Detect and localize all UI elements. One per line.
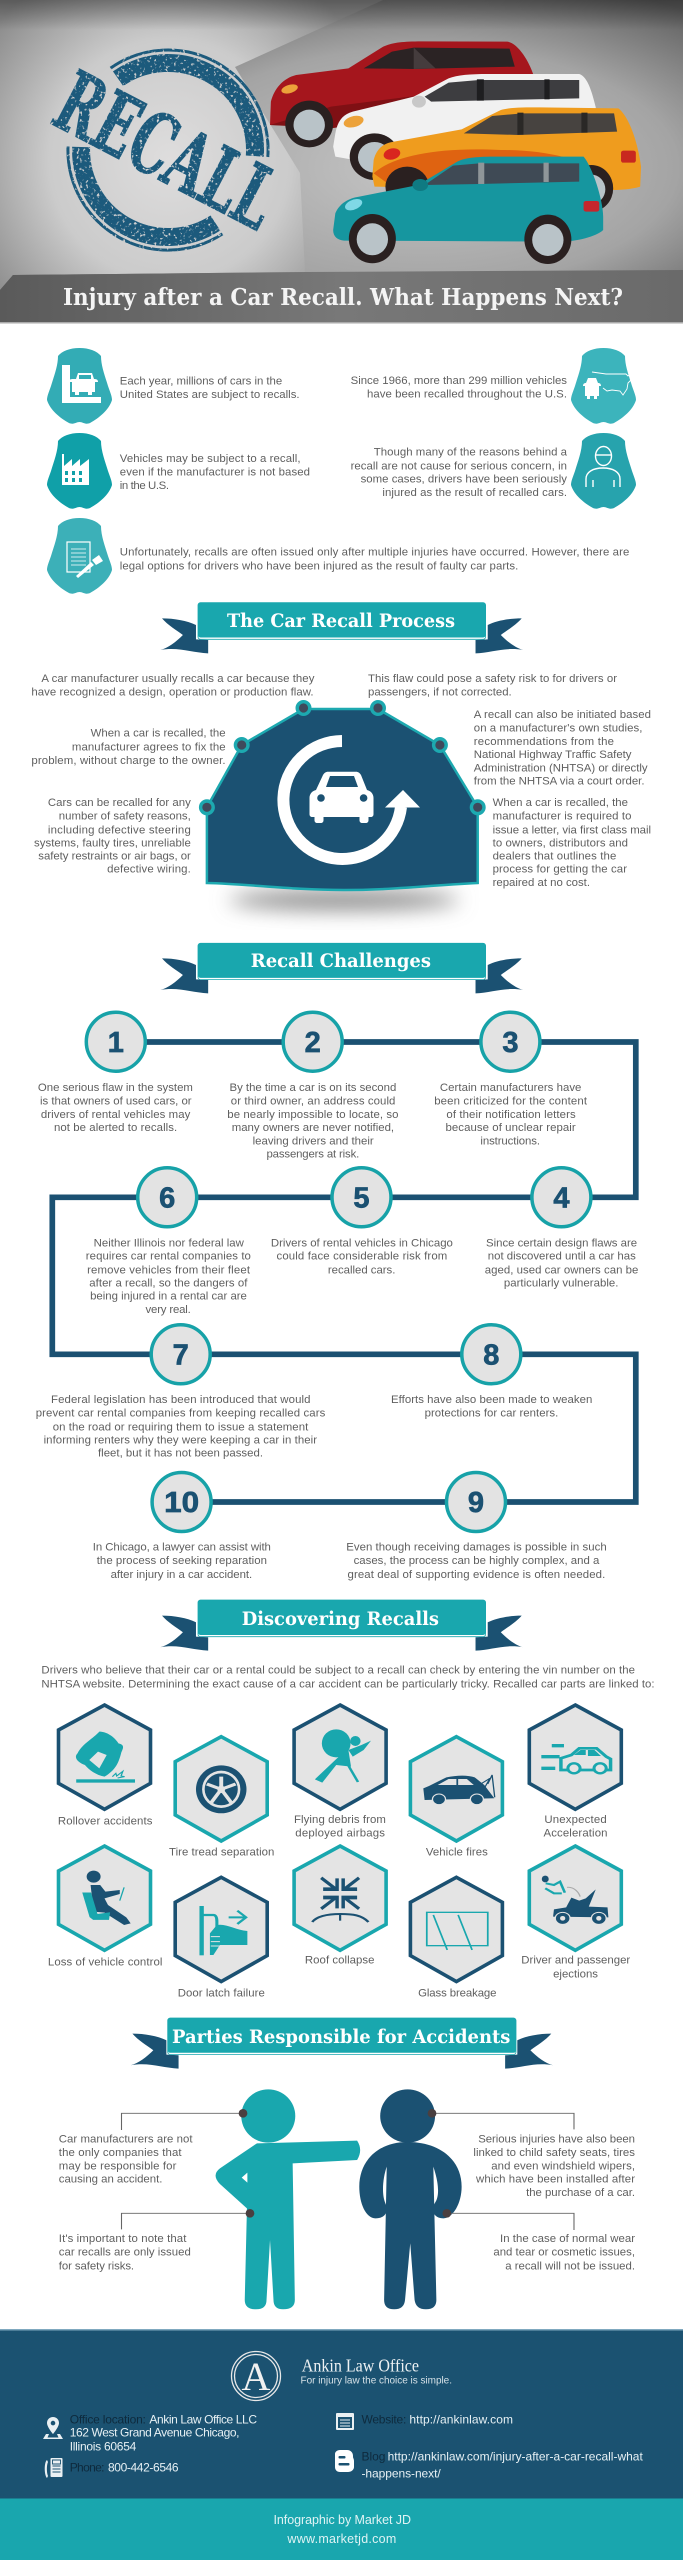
- teal car: [333, 157, 603, 264]
- office location: [43, 2412, 257, 2453]
- hero title: Injury after a Car Recall. What Happens Next?: [63, 284, 623, 311]
- glass breakage: [410, 1877, 502, 1999]
- text: top left: A car manufacturer usually recalls a car because they: [41, 673, 315, 685]
- step 6: after a recall, so the dangers of: [89, 1277, 248, 1289]
- step 5: [271, 1168, 453, 1276]
- teal pointing figure: [216, 2089, 360, 2309]
- unexpected acceleration: Unexpected: [544, 1814, 607, 1826]
- step 5: could face considerable risk from: [276, 1251, 447, 1263]
- unexpected acceleration: Acceleration: [544, 1828, 608, 1840]
- text: car manufacturers: may be responsible for: [59, 2160, 177, 2172]
- step 7: [36, 1325, 326, 1460]
- flying debris from airbags: deployed airbags: [295, 1828, 385, 1840]
- text: seriously injured: Though many of the reasons behind a: [374, 447, 568, 459]
- step 9: [346, 1472, 607, 1581]
- step 10: In Chicago, a lawyer can assist with: [93, 1542, 271, 1554]
- icon: injured driver: [571, 433, 636, 509]
- text: top left: [31, 673, 315, 699]
- step 2: passengers at risk.: [266, 1148, 359, 1160]
- footer: credit bar: Infographic by Market JD: [274, 2513, 411, 2527]
- step 9: great deal of supporting evidence is often needed.: [348, 1569, 605, 1581]
- icon: car front: [310, 772, 374, 823]
- step 6: very real.: [146, 1304, 191, 1316]
- text: seriously injured: [351, 447, 568, 499]
- step 10: [93, 1472, 271, 1581]
- step 4: 4: [553, 1182, 569, 1214]
- recall process shield: [207, 709, 478, 890]
- text: manufacturer not based in US: [120, 453, 310, 492]
- step 2: be nearly impossible to locate, so: [227, 1109, 398, 1121]
- text: letter to owners: manufacturer is required to: [493, 811, 632, 823]
- text: normal wear: [493, 2233, 635, 2272]
- blog: -happens-next/: [362, 2467, 441, 2481]
- blog: [335, 2450, 643, 2481]
- text: letter to owners: [493, 797, 651, 889]
- flying debris from airbags: Flying debris from: [294, 1814, 386, 1826]
- text: discovering recalls intro: [41, 1664, 655, 1690]
- blog: http://ankinlaw.com/injury-after-a-car-recall-what: [388, 2450, 643, 2464]
- text: top right: passengers, if not corrected.: [368, 687, 512, 699]
- text: serious injuries: Serious injuries have also been: [478, 2133, 635, 2145]
- text: letter to owners: issue a letter, via first class mail: [493, 824, 651, 836]
- step 5: recalled cars.: [328, 1264, 395, 1276]
- banner: Recall Challenges: Recall Challenges: [251, 950, 431, 972]
- office location: 162 West Grand Avenue Chicago,: [70, 2426, 240, 2440]
- text: car manufacturers: [59, 2133, 193, 2185]
- text: normal wear: and tear or cosmetic issues,: [493, 2247, 635, 2259]
- text: letter to owners: process for getting the car: [493, 864, 627, 876]
- text: serious injuries: the purchase of a car.: [526, 2187, 635, 2199]
- text: recall initiation: [474, 709, 651, 788]
- text: top right: [368, 673, 617, 699]
- banner: Recall Challenges: [160, 943, 523, 993]
- text: safety risks: [59, 2233, 191, 2272]
- step 3: been criticized for the content: [434, 1095, 588, 1107]
- text: top right: This flaw could pose a safety risk to for drivers or: [368, 673, 617, 685]
- firm name: Ankin Law Office: [302, 2356, 419, 2376]
- glass breakage: Glass breakage: [418, 1987, 496, 1999]
- icon: phone: [45, 2458, 62, 2478]
- dark standing figure: [359, 2089, 462, 2309]
- banner: Parties Responsible for Accidents: [131, 2018, 553, 2069]
- text: safety reasons: number of safety reasons,: [59, 811, 191, 823]
- flying debris from airbags: [294, 1705, 386, 1840]
- text: safety reasons: safety restraints or air bags, or: [38, 851, 191, 863]
- unexpected acceleration: [529, 1705, 621, 1840]
- step 4: not discovered until a car has: [488, 1251, 636, 1263]
- panel: parties responsible figures: [59, 2089, 635, 2309]
- text: letter to owners: When a car is recalled, the: [493, 797, 628, 809]
- step 10: the process of seeking reparation: [97, 1555, 267, 1567]
- text: top left: have recognized a design, operation or production flaw.: [31, 687, 314, 699]
- step 5: Drivers of rental vehicles in Chicago: [271, 1238, 453, 1250]
- step 9: cases, the process can be highly complex, and a: [354, 1555, 600, 1567]
- phone: 800-442-6546: [108, 2461, 179, 2475]
- step 4: [485, 1168, 638, 1289]
- text: recall initiation: A recall can also be initiated based: [474, 709, 651, 721]
- step 6: requires car rental companies to: [86, 1251, 251, 1263]
- step 2: [227, 1012, 398, 1160]
- tire tread separation: Tire tread separation: [169, 1846, 274, 1858]
- rollover accidents: Rollover accidents: [58, 1816, 153, 1828]
- loss of vehicle control: [48, 1846, 162, 1968]
- banner: The Car Recall Process: [160, 603, 523, 653]
- text: manufacturer not based in US: Vehicles may be subject to a recall,: [120, 453, 300, 465]
- step 3: because of unclear repair: [446, 1122, 576, 1134]
- vehicle fires: Vehicle fires: [426, 1846, 488, 1858]
- step 6: [86, 1168, 251, 1316]
- step 6: remove vehicles from their fleet: [87, 1264, 251, 1276]
- office location: Ankin Law Office LLC: [149, 2412, 257, 2426]
- step 2: By the time a car is on its second: [230, 1082, 396, 1094]
- step 3: [434, 1012, 588, 1147]
- step 7: Federal legislation has been introduced that would: [51, 1394, 310, 1406]
- step 10: 10: [164, 1487, 199, 1519]
- text: safety reasons: [34, 797, 191, 876]
- step 8: [391, 1325, 592, 1420]
- text: letter to owners: dealers that outlines the: [493, 851, 616, 863]
- intro panel: [47, 348, 636, 594]
- rollover accidents: [58, 1705, 153, 1828]
- footer: credit bar: [0, 2498, 683, 2560]
- logo: [232, 2352, 280, 2400]
- text: recall initiation: on a manufacturer's own studies,: [474, 723, 642, 735]
- text: safety risks: for safety risks.: [59, 2260, 134, 2272]
- text: discovering recalls intro: Drivers who believe that their car or a rental could be subject to a recall can check by entering the vin number on the: [41, 1664, 635, 1676]
- website: Website:: [362, 2412, 406, 2426]
- driver and passenger ejections: [521, 1846, 630, 1980]
- office location: Illinois 60654: [70, 2439, 137, 2453]
- step 1: One serious flaw in the system: [38, 1082, 193, 1094]
- text: discovering recalls intro: NHTSA website. Determining the exact cause of a car accident can be particularly tricky. Recalled car parts are linked to:: [41, 1678, 655, 1690]
- step 6: Neither Illinois nor federal law: [94, 1238, 245, 1250]
- step 8: Efforts have also been made to weaken: [391, 1394, 592, 1406]
- text: serious injuries: which have been installed after: [475, 2173, 635, 2185]
- office location: Office location:: [70, 2412, 146, 2426]
- red car: [270, 41, 533, 147]
- icon: legal document and gavel: [47, 518, 112, 594]
- text: safety reasons: systems, faulty tires, unreliable: [34, 837, 191, 849]
- text: serious injuries: [473, 2133, 635, 2199]
- text: legal options: [120, 547, 629, 572]
- text: safety reasons: including defective steering: [48, 824, 191, 836]
- step 1: 1: [108, 1027, 124, 1059]
- text: millions of cars: United States are subject to recalls.: [120, 389, 300, 401]
- step 2: or third owner, an address could: [231, 1095, 395, 1107]
- text: recall initiation: recommendations from the: [474, 736, 614, 748]
- step 6: being injured in a rental car are: [90, 1291, 247, 1303]
- step 9: Even though receiving damages is possible in such: [346, 1542, 607, 1554]
- text: car manufacturers: the only companies that: [59, 2147, 182, 2159]
- vehicle fires: [410, 1737, 502, 1858]
- text: seriously injured: recall are not cause for serious concern, in: [351, 460, 567, 472]
- text: 299 million vehicles: Since 1966, more than 299 million vehicles: [351, 375, 567, 387]
- text: legal options: Unfortunately, recalls are often issued only after multiple injuries have occurred. However, there are: [120, 547, 629, 559]
- step 1: [38, 1012, 193, 1134]
- text: manufacturer not based in US: even if the manufacturer is not based: [120, 466, 310, 478]
- step 4: aged, used car owners can be: [485, 1264, 638, 1276]
- text: normal wear: a recall will not be issued.: [505, 2260, 635, 2272]
- text: recall initiation: National Highway Traffic Safety: [474, 749, 632, 761]
- tire tread separation: [169, 1737, 274, 1858]
- callout leaders: [122, 2109, 574, 2230]
- banner: Discovering Recalls: Discovering Recalls: [242, 1608, 439, 1630]
- step 8: 8: [483, 1340, 499, 1372]
- step 3: 3: [502, 1027, 518, 1059]
- text: seriously injured: injured as the result of recalled cars.: [382, 487, 567, 499]
- panel: recall challenges timeline: [36, 1012, 638, 1581]
- text: fix the problem: problem, without charge to the owner.: [31, 755, 226, 767]
- step 7: fleet, but it has not been passed.: [98, 1448, 263, 1460]
- firm name: For injury law the choice is simple.: [300, 2375, 452, 2386]
- panel: recall hazard icons: [48, 1705, 630, 1999]
- timeline connector: [52, 1042, 636, 1502]
- step 3: instructions.: [480, 1135, 540, 1147]
- driver and passenger ejections: ejections: [553, 1968, 598, 1980]
- step 9: 9: [468, 1487, 484, 1519]
- text: car manufacturers: Car manufacturers are not: [59, 2133, 193, 2145]
- step 1: not be alerted to recalls.: [54, 1122, 177, 1134]
- step 1: drivers of rental vehicles may: [41, 1109, 191, 1121]
- step 7: informing renters why they were keeping a car in their: [44, 1434, 317, 1446]
- hero panel: [0, 0, 683, 324]
- white car: [333, 74, 596, 180]
- icon: factory: [47, 433, 112, 509]
- loss of vehicle control: Loss of vehicle control: [48, 1956, 162, 1968]
- step 7: prevent car rental companies from keeping recalled cars: [36, 1408, 326, 1420]
- roof collapse: Roof collapse: [305, 1955, 374, 1967]
- step 10: after injury in a car accident.: [111, 1569, 252, 1581]
- step 6: 6: [159, 1182, 175, 1214]
- door latch failure: [175, 1877, 267, 1999]
- text: safety risks: car recalls are only issued: [59, 2247, 191, 2259]
- icon: car lift: [47, 348, 112, 424]
- step 1: is that owners of used cars, or: [40, 1095, 192, 1107]
- text: manufacturer not based in US: in the U.S.: [120, 480, 169, 492]
- orange car: [372, 107, 641, 212]
- step 3: Certain manufacturers have: [440, 1082, 581, 1094]
- text: seriously injured: some cases, drivers have been seriously: [361, 474, 567, 486]
- step 4: particularly vulnerable.: [504, 1277, 618, 1289]
- text: 299 million vehicles: have been recalled throughout the U.S.: [367, 388, 567, 400]
- roof collapse: [294, 1846, 386, 1967]
- banner: Parties Responsible for Accidents: Parties Responsible for Accidents: [172, 2026, 510, 2048]
- step 4: Since certain design flaws are: [486, 1238, 637, 1250]
- step 8: protections for car renters.: [425, 1408, 558, 1420]
- recall stamp: [39, 50, 294, 250]
- text: fix the problem: When a car is recalled, the: [91, 728, 226, 740]
- step 2: many owners are never notified,: [232, 1122, 394, 1134]
- panel: car recall process: [31, 673, 651, 910]
- icon: blogger: [335, 2450, 354, 2472]
- website: http://ankinlaw.com: [409, 2412, 513, 2426]
- step 2: 2: [305, 1027, 321, 1059]
- text: safety reasons: defective wiring.: [107, 864, 191, 876]
- node markers: [201, 702, 484, 814]
- text: car manufacturers: causing an accident.: [59, 2173, 162, 2185]
- icon: recall cycle arrow: [283, 741, 420, 859]
- driver and passenger ejections: Driver and passenger: [521, 1955, 630, 1967]
- text: safety reasons: Cars can be recalled for any: [48, 797, 191, 809]
- text: serious injuries: linked to child safety seats, tires: [473, 2147, 635, 2159]
- icon: car and US map: [571, 348, 636, 424]
- recall stamp: RECALL: [39, 52, 294, 249]
- text: letter to owners: repaired at no cost.: [493, 877, 590, 889]
- step 3: of their notification letters: [446, 1109, 576, 1121]
- text: fix the problem: [31, 728, 226, 767]
- logo: A: [242, 2354, 271, 2399]
- banner: The Car Recall Process: The Car Recall Process: [227, 610, 455, 632]
- door latch failure: Door latch failure: [178, 1987, 265, 1999]
- icon: map pin: [43, 2417, 63, 2439]
- text: fix the problem: manufacturer agrees to fix the: [72, 741, 226, 753]
- text: millions of cars: Each year, millions of cars in the: [120, 376, 282, 388]
- footer: credit bar: www.marketjd.com: [286, 2532, 396, 2546]
- text: normal wear: In the case of normal wear: [500, 2233, 635, 2245]
- text: serious injuries: and even windshield wipers,: [491, 2160, 635, 2172]
- website: [336, 2412, 513, 2430]
- phone: Phone:: [70, 2461, 104, 2475]
- text: recall initiation: Administration (NHTSA) or directly: [474, 763, 648, 775]
- text: letter to owners: to owners, distributors and: [493, 837, 628, 849]
- shadow: [229, 890, 459, 910]
- text: legal options: legal options for drivers who have been injured as the result of faulty car parts.: [120, 560, 518, 572]
- blog: Blog: [362, 2450, 385, 2464]
- phone: [45, 2458, 179, 2478]
- text: millions of cars: [120, 376, 300, 401]
- text: 299 million vehicles: [351, 375, 567, 400]
- footer: contact panel: [0, 2329, 683, 2498]
- step 2: leaving drivers and their: [253, 1135, 374, 1147]
- icon: browser window: [336, 2413, 354, 2430]
- step 7: on the road or requiring them to issue a statement: [53, 1421, 309, 1433]
- step 7: 7: [173, 1340, 189, 1372]
- banner: Discovering Recalls: [160, 1600, 523, 1651]
- text: safety risks: It's important to note that: [59, 2233, 187, 2245]
- text: recall initiation: from the NHTSA via a court order.: [474, 776, 644, 788]
- firm name: [300, 2356, 452, 2386]
- step 5: 5: [353, 1182, 370, 1214]
